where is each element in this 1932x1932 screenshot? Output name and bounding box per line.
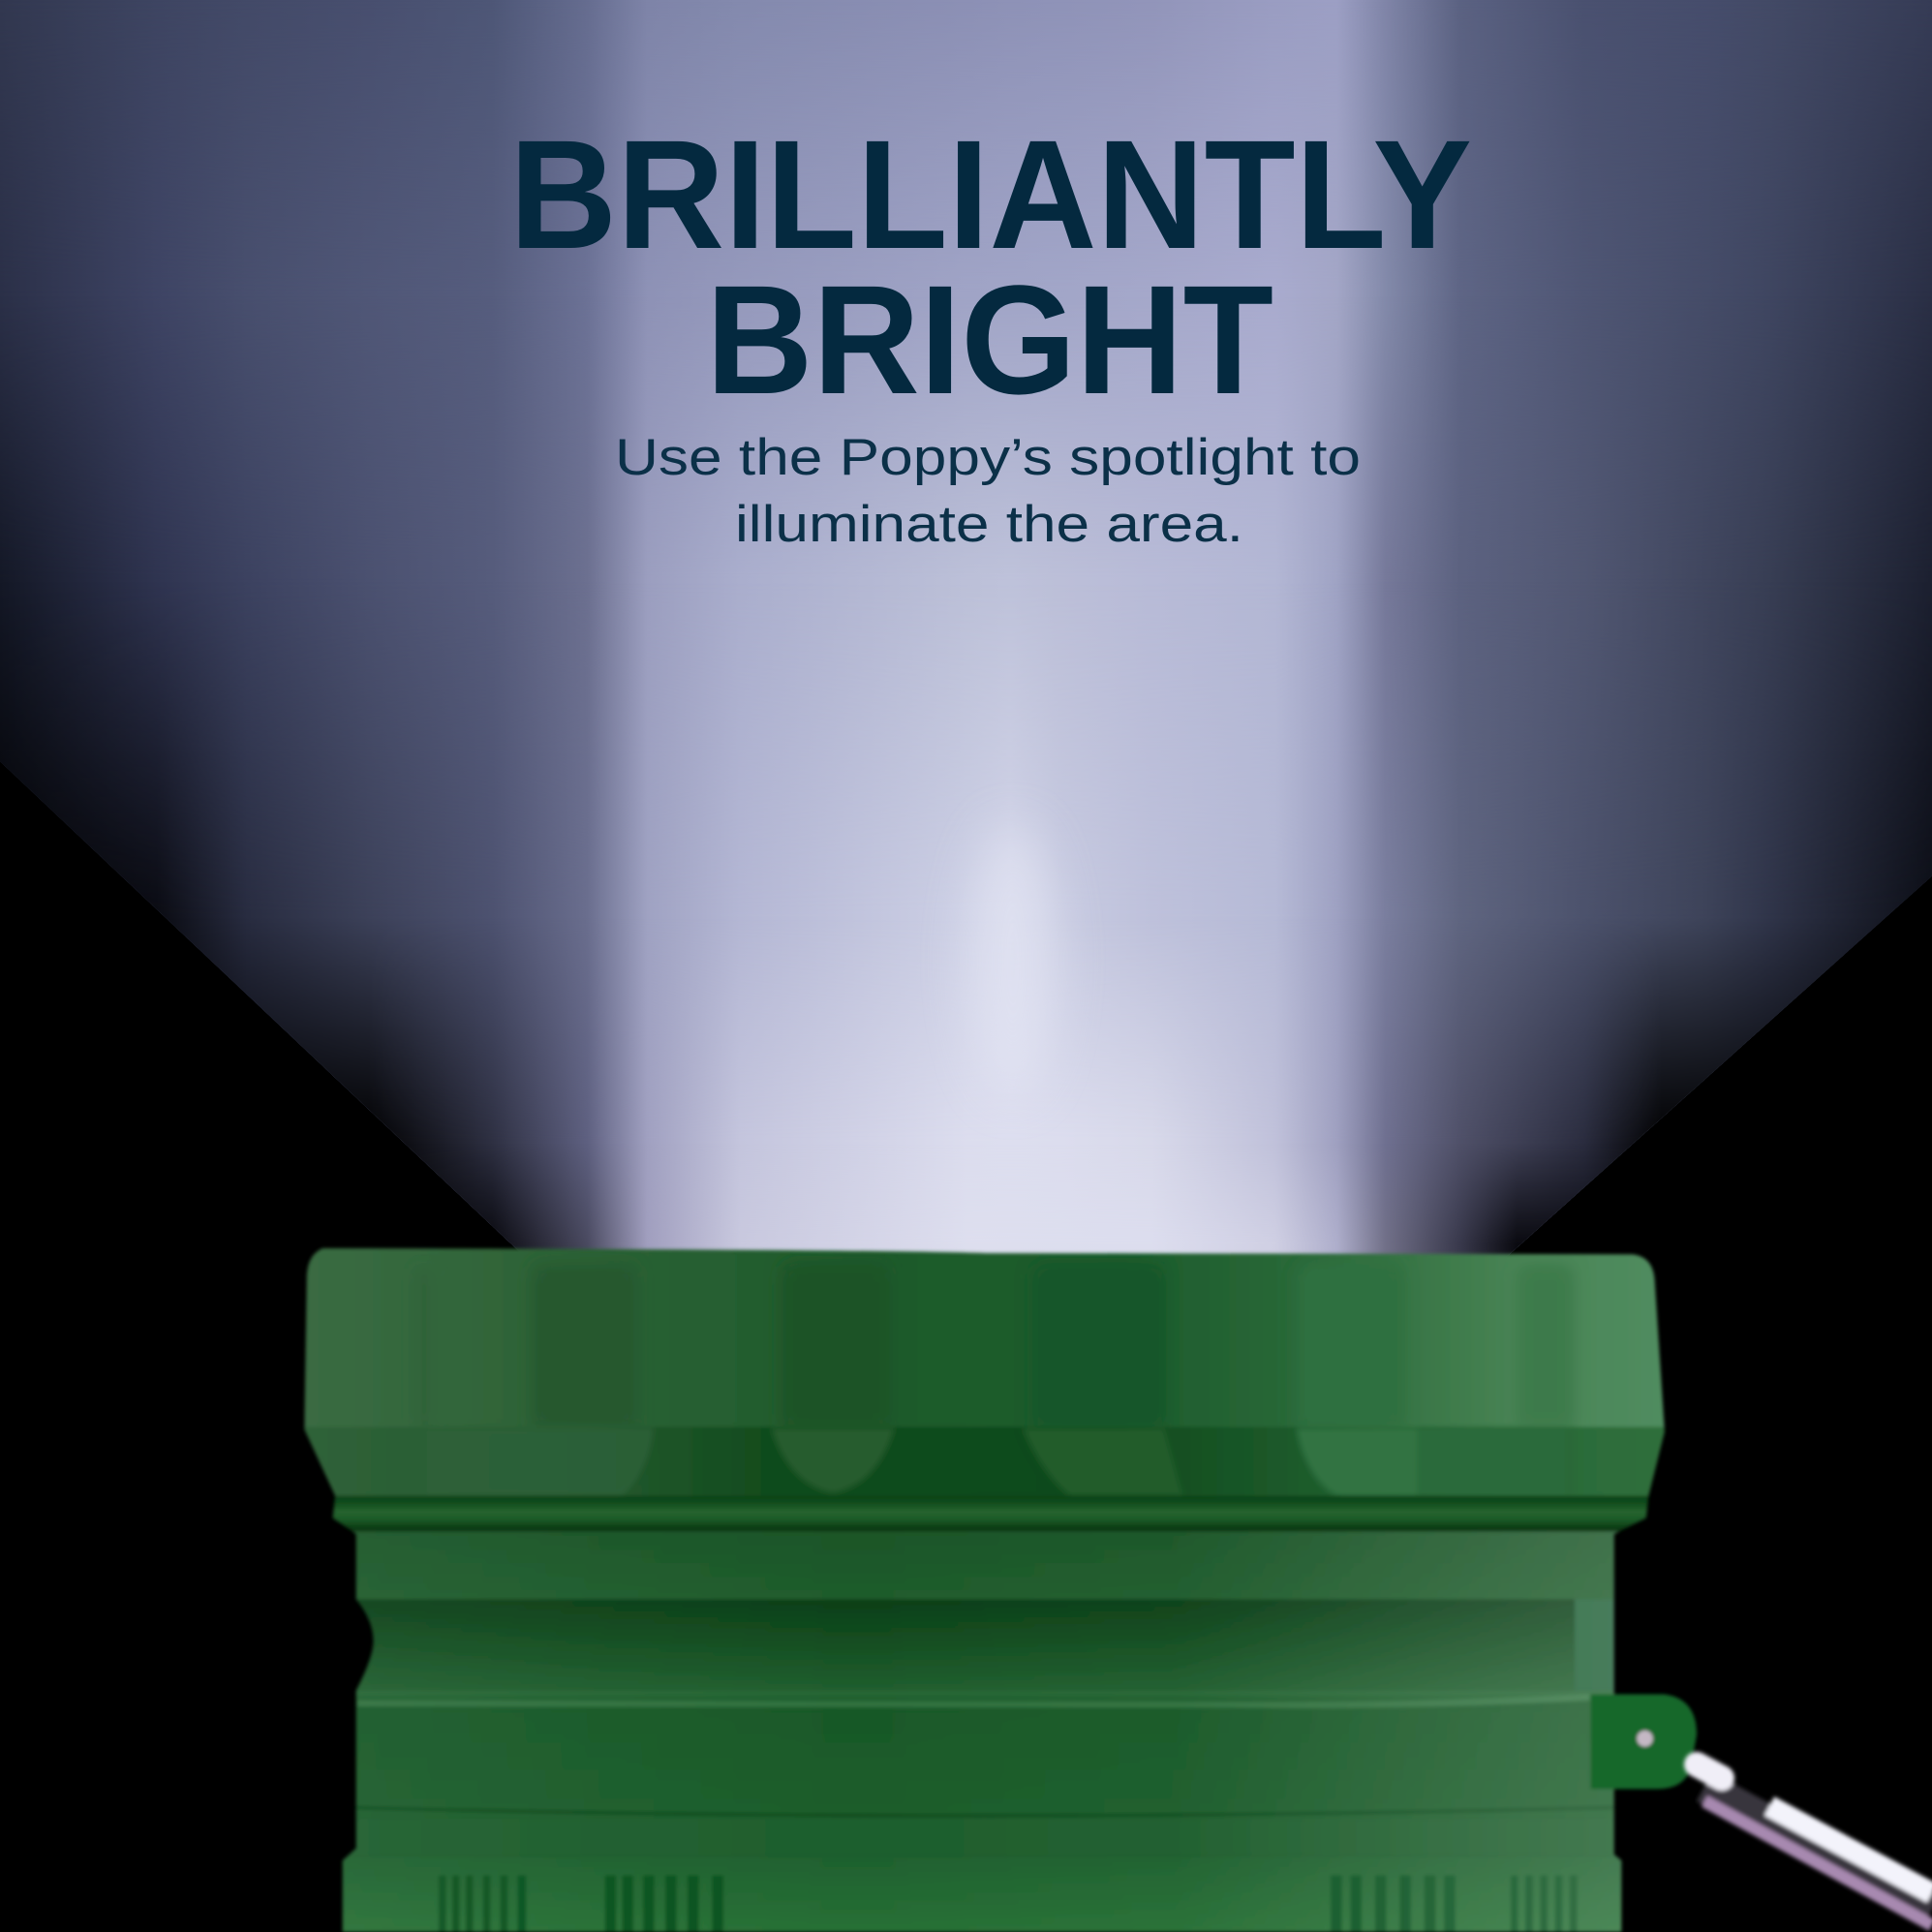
body lower band bbox=[295, 1691, 1675, 1819]
title line 1: BRILLIANTLY bbox=[509, 107, 1472, 281]
head upper bbox=[295, 1239, 1675, 1428]
head flutes bbox=[413, 1263, 1575, 1429]
groove side bbox=[1575, 1599, 1624, 1691]
title bbox=[509, 107, 1472, 426]
body groove bbox=[345, 1599, 1578, 1691]
side lighting bbox=[295, 1531, 1675, 1932]
bevel flute tips bbox=[527, 1426, 1478, 1498]
description line 1: Use the Poppy’s spotlight to bbox=[615, 429, 1361, 486]
head bevel bbox=[295, 1426, 1675, 1497]
grip ribs bbox=[439, 1875, 1578, 1932]
collar bbox=[295, 1819, 1675, 1855]
description line 2: illuminate the area. bbox=[735, 496, 1243, 553]
base section bbox=[295, 1855, 1675, 1932]
band highlight bbox=[357, 1694, 1589, 1708]
title line 2: BRIGHT bbox=[706, 253, 1273, 426]
light beam bbox=[0, 0, 1932, 1356]
beam hot spot bbox=[976, 846, 1056, 1019]
flashlight body bbox=[295, 1239, 1697, 1932]
lanyard tab bbox=[1591, 1694, 1697, 1789]
body upper band bbox=[295, 1531, 1675, 1599]
carabiner wire bbox=[1697, 1764, 1932, 1925]
tab hole bbox=[1637, 1731, 1653, 1747]
seam line bbox=[352, 1807, 1614, 1816]
ring bbox=[295, 1496, 1675, 1535]
description bbox=[615, 429, 1361, 553]
